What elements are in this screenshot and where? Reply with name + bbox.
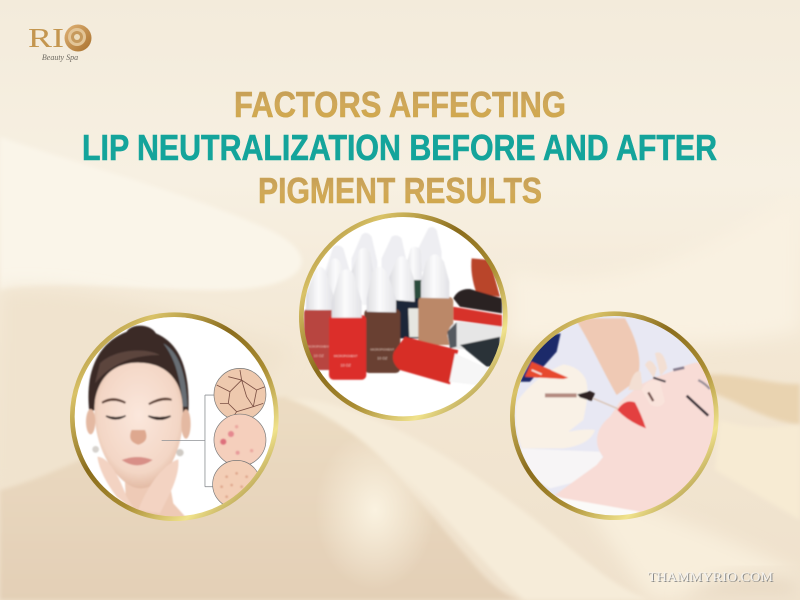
photo circle: lip pigment procedure: [510, 312, 730, 525]
bottle: dark navy: [389, 256, 419, 338]
skin sample: acne: [214, 414, 266, 466]
bottle: bright red: [329, 269, 366, 380]
icon: gold rose: [64, 24, 92, 52]
bottle: dusty red: [304, 267, 333, 370]
bottle: bright red: 10 OZ: [341, 363, 351, 367]
bottle: bright red: MICROPIGMENT: [334, 354, 358, 358]
bottle: dusty red: MICROPIGMENT: [307, 345, 331, 349]
photo circle: woman's face with skin conditions: [70, 313, 278, 521]
skin sample: enlarged pores: [212, 460, 258, 504]
lips: [617, 401, 646, 428]
bottle: red lying front: [393, 337, 488, 386]
bottle: brown: 10 OZ: [377, 357, 388, 361]
navy uniform: [520, 333, 561, 382]
title: [82, 84, 717, 211]
bottle: brown: [364, 267, 400, 373]
skin sample: dry cracked: [214, 368, 266, 420]
bottle: brick red, back right: [471, 258, 500, 297]
bottle: dusty red: 10 OZ: [314, 354, 324, 358]
assistant arm: [575, 318, 639, 395]
gloved hand: [516, 364, 595, 448]
towel: [520, 448, 603, 488]
hair: [88, 326, 189, 415]
bottle: brown: MICROPIGMENT: [371, 348, 394, 352]
face and neck: [556, 362, 714, 512]
logo: RIO Beauty Spa: [28, 23, 92, 62]
bottles lying: right stack: [447, 289, 502, 367]
photo circle: pigment bottles: [299, 213, 507, 421]
title: FACTORS AFFECTING: [234, 84, 566, 125]
website label: THAMMYRIO.COM: [648, 570, 773, 584]
pigment pen: [525, 362, 568, 379]
logo: RIO Beauty Spa: RI: [28, 23, 64, 53]
logo: RIO Beauty Spa: Beauty Spa: [42, 53, 78, 62]
title: PIGMENT RESULTS: [258, 170, 542, 211]
bottle: nude: [418, 254, 453, 345]
website label: THAMMYRIO.COM: [649, 571, 774, 585]
neck and hands: [125, 467, 188, 520]
face: [94, 363, 183, 488]
fingers: [628, 352, 667, 390]
connector lines: [162, 395, 215, 487]
back row white caps: [326, 227, 442, 276]
